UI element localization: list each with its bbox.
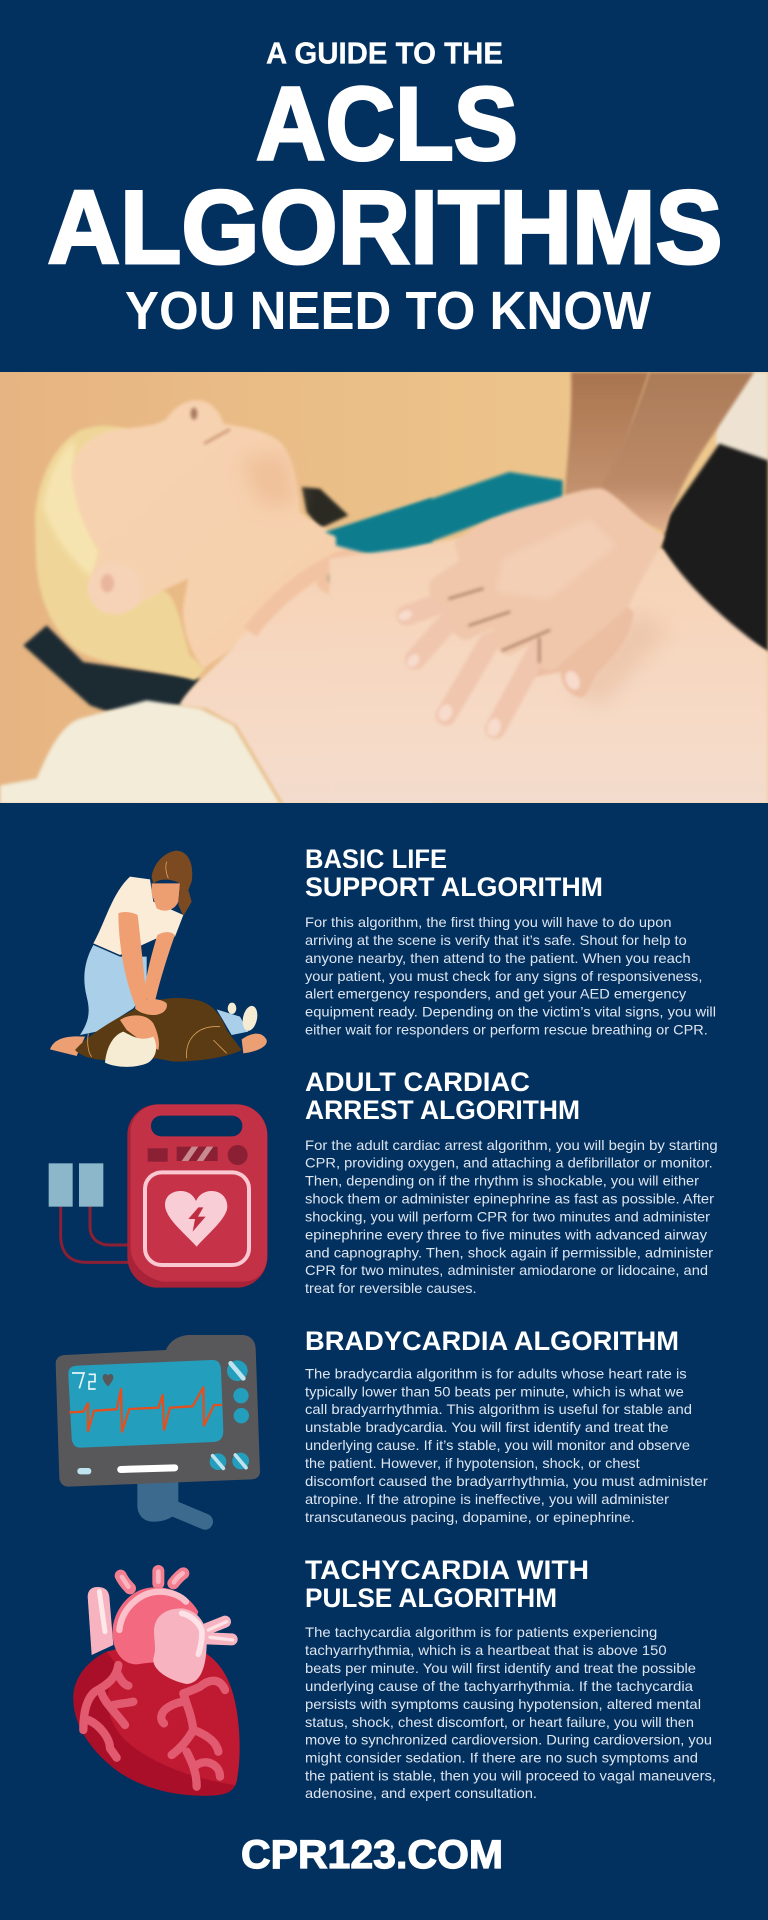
heading: adult cardiac arrest: ADULT CARDIAC <box>305 1067 530 1097</box>
text block: basic life support: For this algorithm, the first thing you will have to do upon <box>305 914 672 930</box>
footer: website: CPR123.COM <box>241 1833 503 1877</box>
photo: hair highlight <box>43 440 100 579</box>
photo: fingernails <box>397 608 583 738</box>
icon: patient heart monitor <box>56 1335 260 1522</box>
text block: adult cardiac arrest: For the adult cardiac arrest algorithm, you will begin by starting <box>305 1137 718 1153</box>
photo: shade under jaw <box>240 452 297 505</box>
text block: bradycardia: the patient. However, if hypotension, shock, or chest <box>305 1455 640 1471</box>
text block: bradycardia: atropine. If the atropine is ineffective, you will administer <box>305 1491 669 1507</box>
heading: adult cardiac arrest <box>305 1067 580 1125</box>
text block: tachycardia with pulse: beats per minute. You will first identify and treat the possible <box>305 1660 696 1676</box>
text block: tachycardia with pulse: status, shock, chest discomfort, or heart failure, you will then <box>305 1714 694 1730</box>
photo: manikin chest left part <box>180 544 432 804</box>
text block: tachycardia with pulse: the patient is stable, then you will proceed to vagal maneuvers, <box>305 1767 716 1783</box>
icon: rescuer performing CPR <box>50 851 267 1067</box>
heading: tachycardia with pulse: PULSE ALGORITHM <box>305 1583 557 1613</box>
photo: arm behind <box>564 372 649 497</box>
text block: basic life support: equipment ready. Depending on the victim’s vital signs, you will <box>305 1004 716 1020</box>
text block: adult cardiac arrest: epinephrine every three to five minutes with advanced airway <box>305 1226 707 1242</box>
text block: basic life support: alert emergency responders, and get your AED emergency <box>305 986 686 1002</box>
photo: manikin nose and mouth <box>191 408 230 444</box>
text block: bradycardia: unstable bradycardia. You will first identify and treat the <box>305 1419 669 1435</box>
icon: AED defibrillator <box>49 1104 267 1288</box>
text block: adult cardiac arrest: Then, depending on if the rhythm is shockable, you will either <box>305 1173 699 1189</box>
photo: manikin hair <box>35 426 205 680</box>
photo: knuckle highlights <box>500 522 610 596</box>
panel: tachycardia with pulse <box>73 1555 716 1801</box>
title: ACLS <box>256 66 518 182</box>
heading: bradycardia: BRADYCARDIA ALGORITHM <box>305 1326 679 1356</box>
heading: basic life support: BASIC LIFE <box>305 844 447 874</box>
panel: bradycardia <box>56 1326 708 1525</box>
text block: tachycardia with pulse: The tachycardia algorithm is for patients experiencing <box>305 1624 657 1640</box>
text block: bradycardia: transcutaneous pacing, dopamine, or epinephrine. <box>305 1509 635 1525</box>
photo: dark clothing right <box>661 444 768 652</box>
photo: white shirt <box>0 700 280 804</box>
text block: basic life support: either wait for responders or perform rescue breathing or CPR. <box>305 1022 708 1038</box>
text block: bradycardia: typically lower than 50 beats per minute, which is what we <box>305 1383 684 1399</box>
photo: chest right part <box>329 539 768 804</box>
text block: bradycardia: The bradycardia algorithm is for adults whose heart rate is <box>305 1366 687 1382</box>
text block: tachycardia with pulse: might consider sedation. If there are no such symptoms and <box>305 1749 698 1765</box>
photo: hands performing CPR on a training manikin <box>0 372 768 804</box>
photo: fingertip left edge <box>405 602 432 664</box>
text block: tachycardia with pulse: adenosine, and expert consultation. <box>305 1785 537 1801</box>
photo: strap behind neck <box>302 487 348 529</box>
text block: basic life support: your patient, you must check for any signs of responsiveness, <box>305 968 702 984</box>
heading: adult cardiac arrest: ARREST ALGORITHM <box>305 1095 580 1125</box>
title <box>48 36 722 341</box>
photo: lower hand palm <box>534 599 633 697</box>
title: A GUIDE TO THE <box>266 36 503 70</box>
panel: adult cardiac arrest <box>49 1067 718 1296</box>
text block: adult cardiac arrest: shock them or administer epinephrine as fast as possible. After <box>305 1191 714 1207</box>
heading: tachycardia with pulse: TACHYCARDIA WITH <box>305 1555 589 1585</box>
photo: finger gaps <box>449 589 549 662</box>
photo: lower hand fingers <box>407 604 543 729</box>
text block: adult cardiac arrest: treat for reversible causes. <box>305 1280 477 1296</box>
title: YOU NEED TO KNOW <box>125 281 651 341</box>
photo: soft chest shading <box>584 617 661 704</box>
text block: adult cardiac arrest: and capnography. Then, shock again if permissible, administer <box>305 1244 713 1260</box>
text block: adult cardiac arrest: shocking, you will perform CPR for two minutes and administer <box>305 1208 710 1224</box>
photo: manikin face and neck <box>72 399 347 668</box>
photo: teal pad right part <box>336 472 563 559</box>
heading: tachycardia with pulse <box>305 1555 589 1613</box>
photo: lower left pad <box>23 625 200 711</box>
text block: tachycardia with pulse: move to synchronized cardioversion. During cardioversion, you <box>305 1732 712 1748</box>
text block: bradycardia <box>305 1366 708 1525</box>
text block: basic life support: arriving at the scene is verify that it’s safe. Shout for help to <box>305 932 687 948</box>
panel: basic life support <box>50 844 716 1067</box>
text block: tachycardia with pulse: persists with symptoms causing hypotension, altered mental <box>305 1696 701 1712</box>
text block: bradycardia: underlying cause. If it’s stable, you will monitor and observe <box>305 1437 690 1453</box>
text block: basic life support: anyone nearby, then attend to the patient. When you reach <box>305 950 691 966</box>
photo: collar ring <box>250 552 380 632</box>
text block: bradycardia: call bradyarrhythmia. This algorithm is useful for stable and <box>305 1401 692 1417</box>
photo: teal pad left part <box>324 496 434 548</box>
photo: white background upper right <box>716 372 768 465</box>
photo: forearm <box>599 372 754 532</box>
photo: metal snap <box>317 573 331 594</box>
text block: tachycardia with pulse: tachyarrhythmia, which is a heartbeat that is above 150 <box>305 1642 667 1658</box>
text block: basic life support <box>305 914 716 1038</box>
heading: basic life support <box>305 844 603 902</box>
heading: basic life support: SUPPORT ALGORITHM <box>305 872 603 902</box>
text block: tachycardia with pulse <box>305 1624 716 1801</box>
photo: manikin ear <box>87 574 136 616</box>
icon: anatomical heart <box>73 1571 240 1796</box>
text block: adult cardiac arrest <box>305 1137 718 1296</box>
text block: tachycardia with pulse: underlying cause of the tachyarrhythmia. If the tachycardia <box>305 1678 693 1694</box>
title: ALGORITHMS <box>48 170 722 286</box>
text block: adult cardiac arrest: CPR, providing oxygen, and attaching a defibrillator or monitor. <box>305 1155 713 1171</box>
text block: bradycardia: discomfort caused the bradyarrhythmia, you must administer <box>305 1473 708 1489</box>
photo: back of upper hand <box>429 488 664 670</box>
text block: adult cardiac arrest: CPR for two minutes, administer amiodarone or lidocaine, and <box>305 1262 708 1278</box>
